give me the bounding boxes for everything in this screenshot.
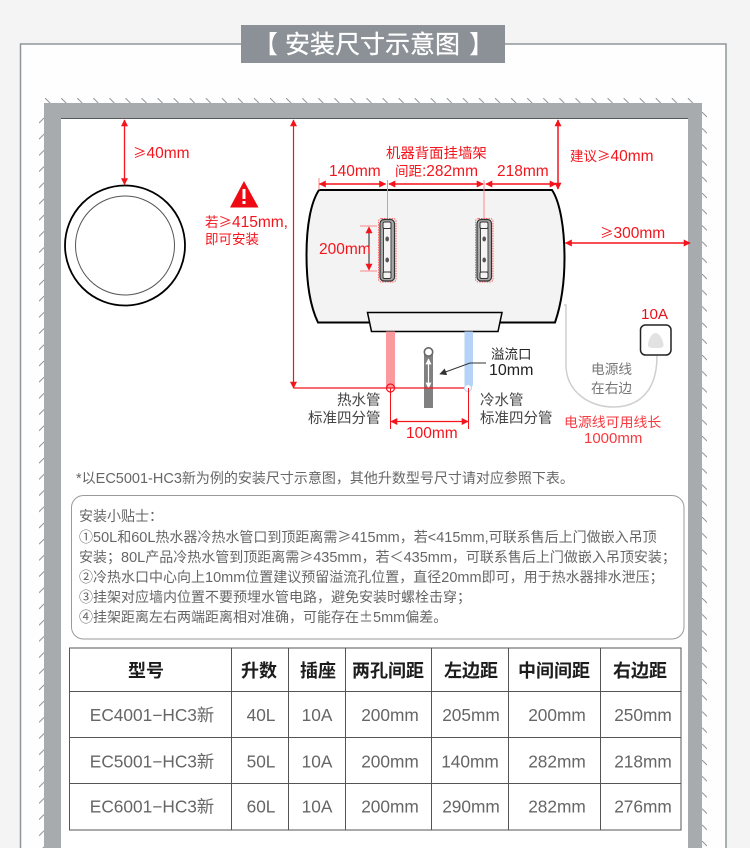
warning text: 即可安装 — [205, 228, 259, 248]
row EC4001: EC4001−HC3新 — [90, 705, 214, 725]
table header: 升数 — [241, 661, 277, 681]
top dimensions: 140mm — [329, 163, 381, 180]
right side clearance: ≥300mm — [600, 222, 665, 242]
row EC4001: 40L — [247, 705, 276, 725]
table header: 中间间距 — [518, 661, 590, 681]
row EC5001: 140mm — [441, 752, 499, 772]
row EC6001: 282mm — [528, 796, 586, 816]
row EC6001 — [90, 796, 672, 816]
cold water pipe — [464, 332, 473, 388]
cord length note: 电源线可用线长 — [564, 412, 661, 432]
installation tips box: ①50L和60L热水器冷热水管口到顶距离需≥415mm，若<415mm,可联系售后上门做嵌入吊顶 — [79, 527, 657, 547]
row EC6001: EC6001−HC3新 — [90, 796, 214, 816]
bracket vertical guides — [319, 178, 484, 218]
hot water pipe — [386, 332, 395, 388]
hot pipe label: 标准四分管 — [308, 407, 380, 428]
top dimensions: 218mm — [497, 163, 549, 180]
row EC6001: 60L — [247, 796, 276, 816]
power socket: 10A — [641, 306, 669, 323]
installation tips box — [72, 496, 684, 639]
installation tips box: ④挂架距离左右两端距离相对准确，可能存在±5mm偏差。 — [79, 607, 447, 627]
right bracket — [476, 218, 493, 282]
heater body — [306, 190, 564, 322]
row EC5001: 218mm — [614, 752, 672, 772]
cord length note — [564, 412, 661, 447]
row EC5001: 10A — [302, 752, 333, 772]
row EC6001: 276mm — [614, 796, 672, 816]
row EC5001: 200mm — [361, 752, 419, 772]
wall hatching — [39, 98, 707, 848]
row EC4001: 200mm — [361, 705, 419, 725]
top dimensions: 机器背面挂墙架 — [386, 142, 487, 163]
heater bottom panel — [368, 312, 502, 332]
warning text — [205, 211, 288, 248]
table header: 两孔间距 — [352, 661, 424, 681]
overflow pipe — [424, 348, 433, 408]
hot pipe label — [308, 389, 380, 428]
top dimensions — [320, 142, 556, 184]
specification table — [69, 648, 681, 830]
side view of heater — [65, 186, 185, 306]
row EC5001 — [90, 752, 672, 772]
title banner: 【 — [253, 25, 278, 61]
wall outline — [44, 103, 702, 848]
power socket — [640, 306, 671, 355]
bracket height dimension: 200mm — [319, 241, 371, 258]
top clearance dimension: ≥40mm — [133, 142, 190, 162]
title banner — [241, 25, 505, 63]
hot pipe label: 热水管 — [337, 389, 380, 410]
row EC6001: 10A — [302, 796, 333, 816]
warning icon — [230, 181, 258, 208]
cold pipe label: 标准四分管 — [480, 407, 552, 428]
table header: 插座 — [300, 660, 336, 681]
installation tips box: 安装；80L产品冷热水管到顶距离需≥435mm，若＜435mm，可联系售后上门做嵌入吊顶安装； — [79, 547, 676, 567]
cold outlet marker — [464, 384, 472, 392]
height dimension line — [292, 120, 294, 388]
row EC4001: 200mm — [528, 705, 586, 725]
installation tips box: 安装小贴士： — [79, 506, 163, 526]
table header: 型号 — [128, 661, 164, 681]
title banner: 安装尺寸示意图 — [285, 25, 460, 61]
cold pipe label: 冷水管 — [480, 389, 524, 410]
row EC5001: EC5001−HC3新 — [90, 752, 214, 772]
right side clearance — [566, 222, 690, 243]
row EC5001: 282mm — [528, 752, 586, 772]
installation tips box: ②冷热水口中心向上10mm位置建议预留溢流孔位置，直径20mm即可，用于热水器排水泄压； — [79, 567, 664, 587]
overflow label: 10mm — [489, 362, 533, 379]
overflow label: 溢流口 — [491, 343, 532, 363]
table header: 左边距 — [444, 661, 498, 681]
right top clearance — [558, 120, 654, 189]
title banner: 】 — [469, 25, 494, 61]
cord label: 在右边 — [591, 377, 632, 397]
top dimensions: 间距:282mm — [395, 160, 478, 180]
power cord — [564, 305, 657, 407]
row EC6001: 290mm — [442, 796, 500, 816]
warning text: 若≥415mm, — [205, 211, 288, 231]
pipe baseline and hot outlet — [294, 384, 468, 392]
cord length note: 1000mm — [584, 430, 642, 447]
pipe spacing dimension: 100mm — [406, 425, 458, 442]
top clearance dimension — [124, 120, 190, 184]
row EC4001: 10A — [302, 705, 333, 725]
installation tips box: ③挂架对应墙内位置不要预埋水管电路，避免安装时螺栓击穿； — [79, 587, 471, 607]
ceiling line — [61, 118, 688, 120]
row EC6001: 200mm — [361, 796, 419, 816]
row EC4001: 250mm — [614, 705, 672, 725]
overflow pointer — [440, 363, 486, 374]
overflow label — [489, 343, 533, 379]
table header — [128, 660, 667, 681]
row EC4001 — [90, 705, 672, 725]
row EC4001: 205mm — [442, 705, 500, 725]
cold pipe label — [480, 389, 552, 428]
right top clearance: 建议≥40mm — [570, 145, 654, 165]
cord label: 电源线 — [591, 358, 632, 378]
footnote: *以EC5001-HC3新为例的安装尺寸示意图，其他升数型号尺寸请对应参照下表。 — [76, 468, 574, 488]
left bracket — [378, 218, 396, 282]
table header: 右边距 — [613, 661, 667, 681]
wall interior — [61, 118, 688, 848]
row EC5001: 50L — [247, 752, 276, 772]
pipe spacing dimension — [390, 388, 468, 442]
cord label — [591, 358, 632, 397]
bracket height dimension — [319, 226, 377, 271]
